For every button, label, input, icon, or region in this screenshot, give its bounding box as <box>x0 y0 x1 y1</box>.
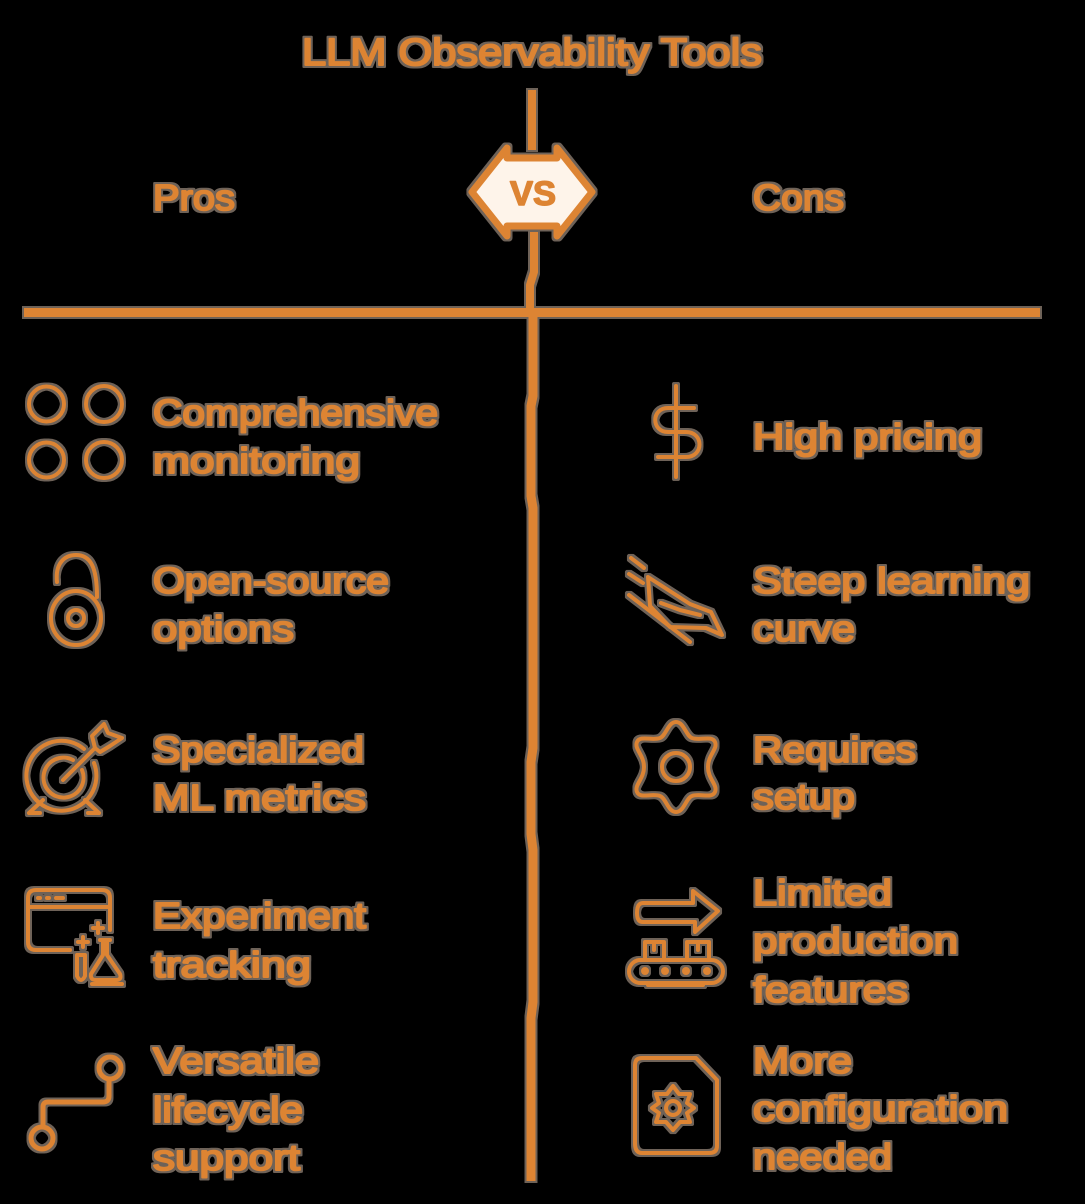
item: specialized ml metrics: ML metrics <box>153 777 366 818</box>
panel: cons <box>629 386 1030 1177</box>
item: experiment tracking: tracking <box>153 944 311 985</box>
icon: target with arrow <box>26 724 122 813</box>
item: open-source options <box>153 560 389 649</box>
vs badge: VS <box>510 175 556 213</box>
item: requires setup: setup <box>753 776 855 817</box>
icon: open lock <box>51 555 101 645</box>
item: high pricing: High pricing <box>753 416 982 457</box>
item: limited production features: Limited <box>753 872 892 913</box>
vertical divider lower <box>531 315 533 1181</box>
horizontal divider <box>24 308 1040 317</box>
item: experiment tracking: Experiment <box>153 895 366 936</box>
column heading: cons: Cons <box>753 177 844 218</box>
column heading: pros: Pros <box>153 177 235 218</box>
item: specialized ml metrics <box>153 729 366 818</box>
item: steep learning curve <box>753 560 1030 649</box>
item: specialized ml metrics: Specialized <box>153 729 364 770</box>
item: more configuration needed <box>753 1040 1008 1177</box>
item: open-source options: Open-source <box>153 560 389 601</box>
item: limited production features: production <box>753 920 958 961</box>
item: versatile lifecycle support <box>153 1040 319 1178</box>
panel: pros <box>26 386 438 1178</box>
item: comprehensive monitoring: monitoring <box>153 440 360 481</box>
item: versatile lifecycle support: lifecycle <box>153 1089 303 1130</box>
item: more configuration needed: needed <box>753 1136 892 1177</box>
item: versatile lifecycle support: support <box>153 1137 300 1178</box>
item: experiment tracking <box>153 895 366 985</box>
item: limited production features: features <box>753 969 908 1010</box>
item: open-source options: options <box>153 608 294 649</box>
icon: four circles <box>29 386 122 478</box>
vertical divider <box>530 90 534 315</box>
icon: route path <box>31 1057 121 1149</box>
icon: dollar sign <box>655 386 700 477</box>
item: more configuration needed: configuration <box>753 1088 1008 1129</box>
item: requires setup: Requires <box>753 729 916 770</box>
item: steep learning curve: Steep learning <box>753 560 1030 601</box>
item: requires setup <box>753 729 916 817</box>
item: limited production features <box>753 872 958 1010</box>
item: versatile lifecycle support: Versatile <box>153 1040 319 1081</box>
icon: steep curve <box>629 558 722 642</box>
item: steep learning curve: curve <box>753 608 855 649</box>
item: comprehensive monitoring <box>153 392 438 481</box>
title: LLM Observability Tools <box>302 32 762 74</box>
icon: browser and flask <box>28 890 122 984</box>
icon: conveyor with arrow <box>629 891 723 985</box>
icon: gear <box>636 722 716 812</box>
item: more configuration needed: More <box>753 1040 852 1081</box>
icon: document with gear <box>635 1058 717 1153</box>
item: comprehensive monitoring: Comprehensive <box>153 392 438 433</box>
vs badge <box>472 148 592 236</box>
